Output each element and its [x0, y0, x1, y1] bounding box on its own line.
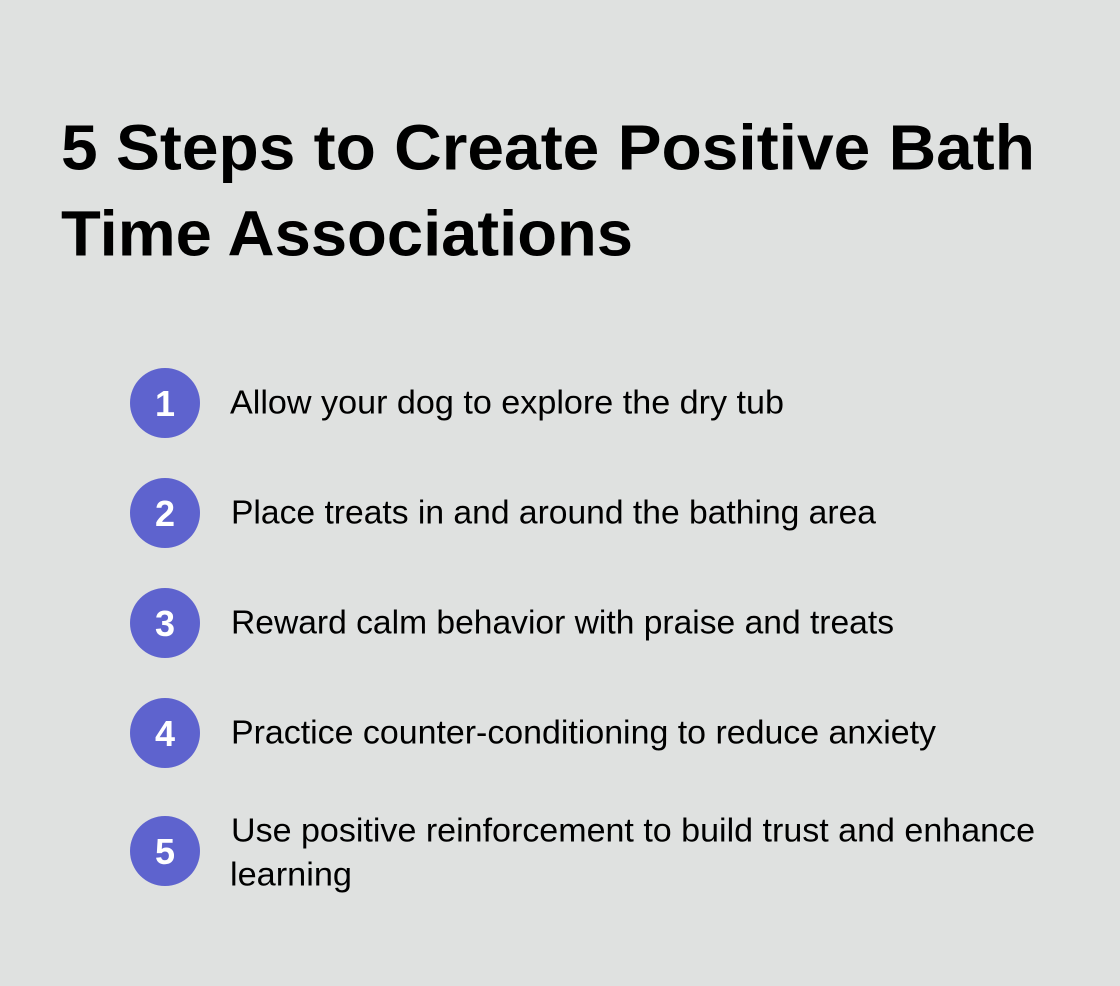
step 5 text: [230, 812, 1035, 893]
step 4 text: Practice counter-conditioning to reduce anxiety: [231, 714, 937, 750]
title: Time Associations: [61, 198, 633, 270]
step 4 badge: [130, 698, 200, 768]
step 1 badge: [130, 368, 200, 438]
step 3 badge: [130, 588, 200, 658]
step 5: [130, 812, 1035, 893]
step 5 text: Use positive reinforcement to build trust and enhance: [231, 812, 1035, 849]
step 2 badge: 2: [155, 493, 175, 534]
step 1 badge: 1: [155, 383, 175, 424]
step 1: [130, 368, 784, 438]
step 2 badge: [130, 478, 200, 548]
step 5 text: learning: [230, 856, 352, 893]
step 3 text: Reward calm behavior with praise and treats: [231, 604, 894, 640]
step 4 badge: 4: [155, 713, 175, 754]
step 3 badge: 3: [155, 603, 175, 644]
title: 5 Steps to Create Positive Bath: [61, 112, 1035, 184]
step 2: [130, 478, 877, 548]
step 5 badge: [130, 816, 200, 886]
step 3: [130, 588, 894, 658]
step 5 badge: 5: [155, 831, 175, 872]
step 4: [130, 698, 937, 768]
title: [61, 112, 1035, 270]
step 1 text: Allow your dog to explore the dry tub: [230, 384, 784, 420]
step 2 text: Place treats in and around the bathing area: [231, 494, 877, 530]
